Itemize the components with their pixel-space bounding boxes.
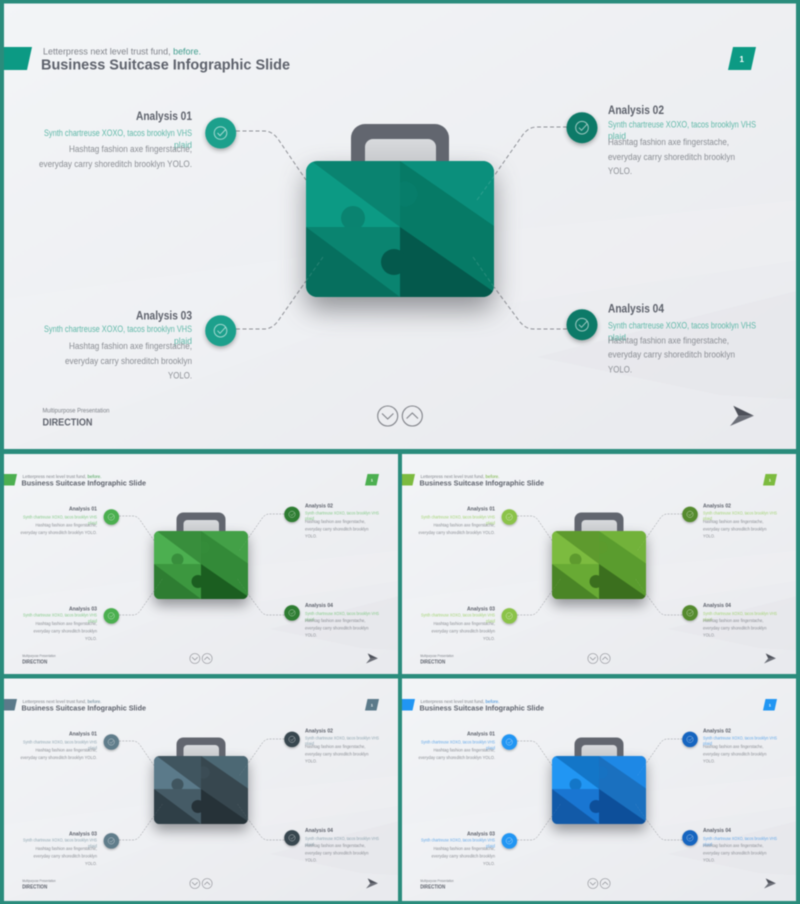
footer label: Multipurpose Presentation (420, 654, 454, 658)
page number tag: 1 (769, 478, 772, 482)
header text: Business Suitcase Infographic Slide (41, 56, 290, 74)
analysis 01: everyday carry shoreditch brooklyn YOLO. (20, 530, 97, 535)
page number tag (763, 699, 777, 710)
analysis 02 (703, 728, 777, 764)
header tag left (1, 474, 17, 486)
analysis 04 (305, 603, 379, 638)
footer label (420, 879, 454, 890)
navigation buttons (378, 406, 422, 426)
analysis 01: everyday carry shoreditch brooklyn YOLO. (39, 159, 192, 169)
analysis 01: plaid (174, 140, 192, 150)
header text: Letterpress next level trust fund, before. (22, 474, 102, 480)
analysis 01: Analysis 01 (69, 506, 98, 512)
analysis 02: Hashtag fashion axe fingerstache, (608, 137, 729, 147)
slide background (1, 450, 401, 676)
connector lines (119, 739, 284, 840)
slide background (1, 676, 401, 902)
analysis 01: Analysis 01 (69, 732, 98, 738)
footer label (420, 654, 454, 665)
suitcase icon (306, 124, 495, 310)
analysis 04 (305, 828, 379, 863)
suitcase shadow (552, 762, 646, 830)
connector lines (236, 127, 567, 329)
page number tag (763, 474, 777, 486)
analysis 03: Hashtag fashion axe fingerstache, (36, 846, 97, 851)
analysis 01 (418, 506, 496, 535)
analysis 03: Synth chartreuse XOXO, tacos brooklyn VHS (421, 612, 495, 618)
paper plane icon (366, 878, 378, 888)
analysis 01: everyday carry shoreditch brooklyn YOLO. (418, 530, 495, 535)
analysis 02: Synth chartreuse XOXO, tacos brooklyn VHS (305, 735, 379, 740)
analysis 02: Synth chartreuse XOXO, tacos brooklyn VHS (703, 510, 777, 515)
analysis 04: Analysis 04 (703, 828, 732, 834)
analysis 03: YOLO. (85, 636, 97, 641)
analysis 02: Analysis 02 (608, 105, 664, 117)
analysis 01: Synth chartreuse XOXO, tacos brooklyn VHS (421, 514, 495, 520)
suitcase handle (574, 512, 624, 538)
analysis 04: YOLO. (703, 633, 715, 638)
analysis 01 (20, 732, 98, 760)
header text: Letterpress next level trust fund, before. (22, 699, 102, 705)
suitcase body (306, 157, 495, 297)
analysis 03: Analysis 03 (467, 606, 495, 612)
header text: Business Suitcase Infographic Slide (420, 703, 544, 712)
header text: Business Suitcase Infographic Slide (420, 478, 544, 487)
badge 02 (284, 507, 300, 522)
analysis 02: Hashtag fashion axe fingerstache, (703, 744, 764, 749)
analysis 04: Synth chartreuse XOXO, tacos brooklyn VHS (305, 836, 379, 841)
footer label: DIRECTION (42, 417, 92, 429)
badge 03 (205, 315, 236, 346)
analysis 03 (23, 606, 97, 641)
header text (420, 474, 544, 487)
suitcase handle (176, 738, 226, 762)
navigation buttons (588, 654, 610, 664)
analysis 01: Analysis 01 (136, 111, 193, 123)
connector lines (119, 514, 284, 615)
badge 03 (104, 608, 119, 624)
page number tag (365, 699, 379, 710)
analysis 02 (305, 728, 379, 764)
suitcase shadow (306, 172, 494, 310)
analysis 01: Synth chartreuse XOXO, tacos brooklyn VHS (23, 740, 97, 744)
footer label (22, 879, 56, 890)
analysis 03: Hashtag fashion axe fingerstache, (69, 341, 192, 351)
analysis 01: Analysis 01 (467, 732, 496, 738)
analysis 03: plaid (88, 844, 97, 848)
analysis 03: everyday carry shoreditch brooklyn (432, 854, 495, 858)
analysis 01: Hashtag fashion axe fingerstache, (36, 748, 97, 752)
analysis 02: plaid (608, 131, 626, 141)
analysis 03: YOLO. (168, 371, 192, 381)
badge 03 (502, 833, 517, 849)
analysis 02: everyday carry shoreditch brooklyn (608, 152, 735, 162)
analysis 01: plaid (486, 746, 495, 750)
paper plane icon (764, 653, 776, 664)
analysis 02: everyday carry shoreditch brooklyn (305, 752, 369, 756)
badge 04 (284, 605, 300, 621)
page number tag (728, 47, 756, 70)
analysis 03: everyday carry shoreditch brooklyn (432, 628, 495, 634)
analysis 03: Hashtag fashion axe fingerstache, (434, 846, 495, 851)
footer label: DIRECTION (22, 659, 47, 665)
analysis 04: plaid (305, 617, 314, 622)
connector lines (517, 739, 682, 840)
analysis 02: plaid (305, 741, 314, 746)
analysis 04: YOLO. (305, 858, 317, 863)
paper plane icon (764, 878, 776, 888)
analysis 03: everyday carry shoreditch brooklyn (34, 628, 97, 634)
header text: Business Suitcase Infographic Slide (22, 478, 146, 487)
analysis 03: plaid (88, 618, 97, 624)
analysis 03: YOLO. (483, 861, 495, 866)
badge 01 (104, 734, 119, 750)
analysis 02: plaid (703, 741, 712, 746)
analysis 04 (703, 603, 777, 638)
suitcase icon (154, 738, 248, 830)
suitcase body (154, 754, 248, 824)
connector lines (517, 514, 682, 615)
analysis 01 (418, 732, 496, 760)
footer label: DIRECTION (22, 884, 47, 890)
analysis 01: Synth chartreuse XOXO, tacos brooklyn VHS (23, 514, 97, 520)
analysis 04: Synth chartreuse XOXO, tacos brooklyn VHS (703, 836, 777, 841)
analysis 03: Synth chartreuse XOXO, tacos brooklyn VHS (421, 838, 495, 842)
header text (22, 474, 146, 487)
badge 03 (502, 608, 517, 624)
analysis 01: Analysis 01 (467, 506, 496, 512)
badge 02 (566, 112, 598, 143)
suitcase body (552, 529, 646, 599)
analysis 04: everyday carry shoreditch brooklyn (608, 350, 735, 360)
analysis 04: Hashtag fashion axe fingerstache, (703, 618, 764, 623)
suitcase shadow (552, 536, 646, 606)
badge 04 (682, 830, 698, 846)
analysis 04: Analysis 04 (608, 304, 665, 316)
page number tag: 1 (371, 702, 374, 708)
analysis 03: Hashtag fashion axe fingerstache, (36, 621, 97, 626)
analysis 04: Synth chartreuse XOXO, tacos brooklyn VHS (608, 321, 756, 331)
footer label: DIRECTION (420, 884, 445, 890)
analysis 02: everyday carry shoreditch brooklyn (703, 752, 767, 756)
analysis 03: plaid (486, 844, 495, 848)
header tag left (0, 47, 32, 70)
analysis 03: plaid (174, 336, 192, 346)
analysis 03 (23, 831, 97, 866)
analysis 03: YOLO. (85, 861, 97, 866)
analysis 04: everyday carry shoreditch brooklyn (305, 625, 369, 630)
analysis 03: Synth chartreuse XOXO, tacos brooklyn VHS (23, 838, 97, 842)
header text: Business Suitcase Infographic Slide (22, 703, 146, 712)
footer label (22, 654, 56, 665)
analysis 02: Hashtag fashion axe fingerstache, (703, 519, 764, 524)
header text (420, 699, 544, 712)
analysis 03: Analysis 03 (467, 831, 495, 837)
suitcase handle (351, 124, 449, 174)
analysis 04: Analysis 04 (703, 603, 732, 609)
analysis 03: everyday carry shoreditch brooklyn (34, 854, 97, 858)
suitcase icon (154, 512, 248, 606)
badge 01 (502, 509, 517, 525)
suitcase handle (176, 512, 226, 538)
header text: Letterpress next level trust fund, before. (420, 474, 500, 480)
header tag left (399, 699, 415, 710)
analysis 04: Synth chartreuse XOXO, tacos brooklyn VHS (703, 611, 777, 616)
analysis 02: Analysis 02 (703, 728, 731, 734)
slide background (399, 450, 799, 676)
badge 03 (104, 833, 119, 849)
analysis 02: YOLO. (305, 534, 317, 538)
analysis 01: plaid (88, 520, 97, 526)
analysis 02: plaid (305, 516, 314, 521)
suitcase body (154, 529, 248, 599)
slide: slate (1, 676, 401, 902)
analysis 02: Synth chartreuse XOXO, tacos brooklyn VHS (305, 510, 379, 515)
header text (41, 46, 290, 74)
analysis 01: everyday carry shoreditch brooklyn YOLO. (20, 755, 97, 760)
badge 01 (205, 118, 236, 148)
analysis 02: everyday carry shoreditch brooklyn (305, 526, 369, 532)
analysis 04: everyday carry shoreditch brooklyn (703, 850, 767, 855)
analysis 04: plaid (608, 333, 626, 343)
analysis 02: YOLO. (703, 534, 715, 538)
analysis 02: Analysis 02 (305, 504, 333, 510)
analysis 04: plaid (703, 842, 712, 847)
analysis 04: everyday carry shoreditch brooklyn (703, 625, 767, 630)
analysis 02: Analysis 02 (305, 728, 333, 734)
analysis 02 (703, 504, 777, 538)
slide background (399, 676, 799, 902)
analysis 03 (421, 831, 495, 866)
analysis 04: YOLO. (703, 858, 715, 863)
analysis 01: plaid (88, 746, 97, 750)
analysis 01: plaid (486, 520, 495, 526)
footer label: Multipurpose Presentation (420, 879, 454, 883)
footer label: DIRECTION (420, 659, 445, 665)
slide: green (1, 450, 401, 676)
analysis 04 (608, 304, 756, 374)
analysis 03 (44, 310, 192, 381)
analysis 03: plaid (486, 618, 495, 624)
analysis 03: Analysis 03 (69, 831, 97, 837)
page number tag: 1 (769, 702, 772, 708)
analysis 03: Analysis 03 (136, 310, 192, 322)
badge 04 (284, 830, 300, 846)
analysis 04: Hashtag fashion axe fingerstache, (305, 843, 366, 848)
analysis 03: Synth chartreuse XOXO, tacos brooklyn VHS (44, 324, 192, 334)
analysis 02: Hashtag fashion axe fingerstache, (305, 519, 366, 524)
slide: teal main (0, 0, 800, 452)
analysis 01: Hashtag fashion axe fingerstache, (434, 522, 495, 528)
page number tag (365, 474, 379, 486)
slide: blue (399, 676, 799, 902)
analysis 04: Hashtag fashion axe fingerstache, (608, 335, 729, 345)
analysis 04: plaid (703, 617, 712, 622)
navigation buttons (190, 878, 212, 888)
analysis 04: Synth chartreuse XOXO, tacos brooklyn VHS (305, 611, 379, 616)
page number tag: 1 (371, 478, 374, 482)
analysis 03: Hashtag fashion axe fingerstache, (434, 621, 495, 626)
analysis 04: plaid (305, 842, 314, 847)
slide: lime (399, 450, 799, 676)
header tag left (399, 474, 415, 486)
analysis 04: YOLO. (305, 633, 317, 638)
analysis 04: Analysis 04 (305, 603, 334, 609)
analysis 02 (305, 504, 379, 538)
analysis 02: Synth chartreuse XOXO, tacos brooklyn VHS (608, 120, 756, 130)
navigation buttons (588, 878, 610, 888)
analysis 02 (608, 105, 756, 176)
badge 04 (682, 605, 698, 621)
analysis 02: plaid (703, 516, 712, 521)
footer label: Multipurpose Presentation (22, 879, 56, 883)
suitcase icon (552, 738, 646, 830)
analysis 02: YOLO. (608, 166, 632, 176)
analysis 04: Hashtag fashion axe fingerstache, (703, 843, 764, 848)
analysis 02: Synth chartreuse XOXO, tacos brooklyn VHS (703, 735, 777, 740)
footer label (42, 408, 110, 429)
analysis 01: everyday carry shoreditch brooklyn YOLO. (418, 755, 495, 760)
page number tag: 1 (739, 55, 744, 64)
analysis 04: Hashtag fashion axe fingerstache, (305, 618, 366, 623)
analysis 01: Hashtag fashion axe fingerstache, (69, 144, 192, 154)
badge 01 (502, 734, 517, 750)
paper plane icon (730, 406, 754, 426)
suitcase body (552, 754, 646, 824)
analysis 01: Hashtag fashion axe fingerstache, (36, 522, 97, 528)
header text: Letterpress next level trust fund, before. (420, 699, 500, 705)
suitcase icon (552, 512, 646, 606)
suitcase shadow (154, 762, 248, 830)
analysis 01: Synth chartreuse XOXO, tacos brooklyn VHS (44, 128, 192, 138)
badge 01 (104, 509, 119, 525)
paper plane icon (366, 653, 378, 664)
navigation buttons (190, 654, 212, 664)
analysis 01 (20, 506, 98, 535)
header text (22, 699, 146, 712)
analysis 04: YOLO. (608, 364, 632, 374)
footer label: Multipurpose Presentation (22, 654, 56, 658)
header tag left (1, 699, 17, 710)
analysis 02: Hashtag fashion axe fingerstache, (305, 744, 366, 749)
analysis 01: Synth chartreuse XOXO, tacos brooklyn VHS (421, 740, 495, 744)
analysis 03: Analysis 03 (69, 606, 97, 612)
suitcase handle (574, 738, 624, 762)
analysis 01: Hashtag fashion axe fingerstache, (434, 748, 495, 752)
analysis 02: YOLO. (703, 758, 715, 764)
analysis 02: Analysis 02 (703, 504, 731, 510)
analysis 03 (421, 606, 495, 641)
analysis 04: Analysis 04 (305, 828, 334, 834)
badge 02 (682, 732, 698, 747)
badge 04 (566, 309, 598, 340)
header text: Letterpress next level trust fund, before. (43, 46, 201, 58)
analysis 04 (703, 828, 777, 863)
analysis 02: YOLO. (305, 758, 317, 764)
badge 02 (284, 732, 300, 747)
suitcase shadow (154, 536, 248, 606)
analysis 03: YOLO. (483, 636, 495, 641)
slide background (0, 0, 800, 452)
analysis 03: everyday carry shoreditch brooklyn (65, 356, 192, 366)
analysis 04: everyday carry shoreditch brooklyn (305, 850, 369, 855)
analysis 03: Synth chartreuse XOXO, tacos brooklyn VHS (23, 612, 97, 618)
footer label: Multipurpose Presentation (42, 408, 110, 415)
badge 02 (682, 507, 698, 522)
analysis 02: everyday carry shoreditch brooklyn (703, 526, 767, 532)
analysis 01 (39, 111, 193, 169)
